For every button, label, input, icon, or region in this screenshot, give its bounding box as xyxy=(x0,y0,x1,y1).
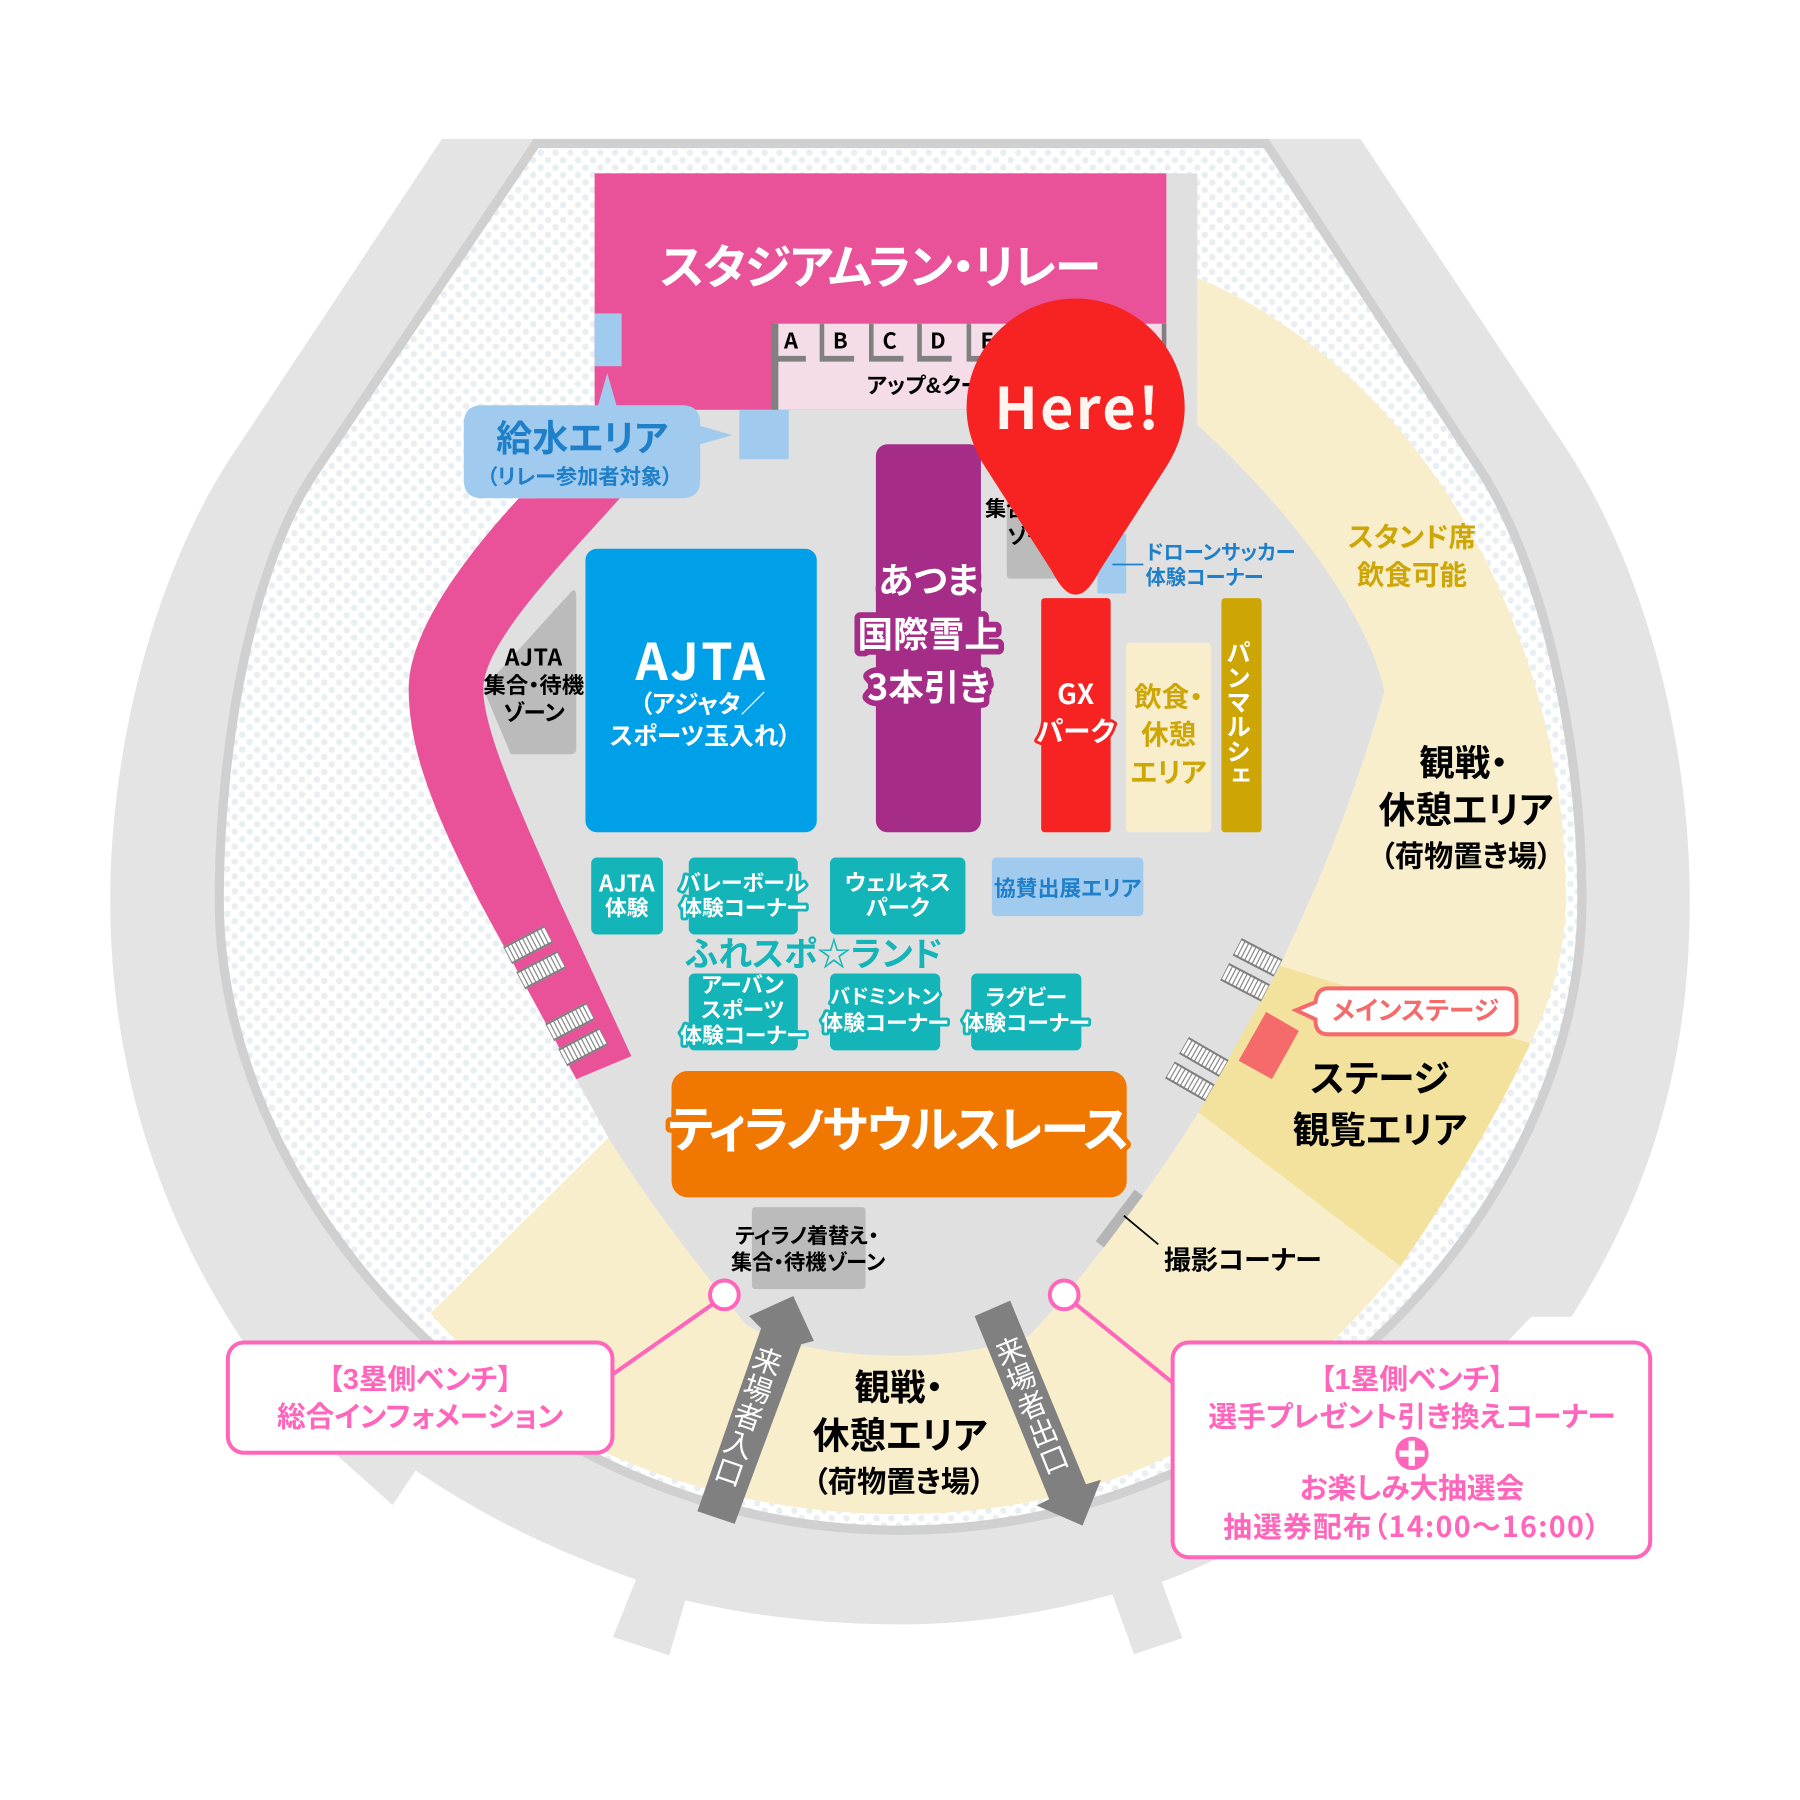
teal booth: badminton: 体験コーナー xyxy=(821,1010,949,1035)
drone soccer corner xyxy=(1097,534,1295,593)
panel: food and rest area xyxy=(1126,643,1211,832)
panel: AJTA: AJTA xyxy=(634,621,767,695)
arrow: visitor exit: 来場者出口 xyxy=(986,1330,1078,1481)
tyrannosaurus changing zone xyxy=(731,1207,885,1289)
panel: food and rest area: エリア xyxy=(1131,757,1207,788)
arrow: visitor entrance: 来場者入口 xyxy=(705,1341,792,1492)
panel: international snow tug of war: 国際雪上 xyxy=(858,615,1000,655)
teal booth: wellness park: ウェルネス xyxy=(845,870,951,895)
text: stand seating: スタンド席 xyxy=(1348,522,1476,553)
panel: international snow tug of war: あつま xyxy=(878,561,979,601)
text: stand seating: 飲食可能 xyxy=(1357,560,1467,591)
stairs on track xyxy=(503,926,608,1066)
heading: fureai sports land: ふれスポ☆ランド xyxy=(684,936,943,974)
drone soccer corner: ドローンサッカー xyxy=(1146,542,1295,564)
callout: first base bench: 抽選券配布（14:00～16:00） xyxy=(1223,1505,1601,1546)
panel: GX park xyxy=(1036,598,1115,832)
main stage marker xyxy=(1239,1012,1299,1079)
warm-up and cool-down zone: E xyxy=(981,324,994,355)
teal booth: wellness park xyxy=(830,858,965,934)
callout: third base bench: 【3塁側ベンチ】 xyxy=(329,1364,512,1396)
teal booth: AJTA experience: 体験 xyxy=(605,896,649,921)
callout: first base bench: お楽しみ大抽選会 xyxy=(1300,1473,1525,1505)
panel: bread marche xyxy=(1221,598,1262,832)
AJTA waiting zone: 集合・待機 xyxy=(483,673,585,698)
pin: here marker xyxy=(967,298,1185,595)
text: right viewing area xyxy=(1379,743,1554,874)
warm-up and cool-down zone xyxy=(771,324,1166,410)
teal booth: badminton xyxy=(821,973,949,1050)
teal booth: badminton: バドミントン xyxy=(830,986,940,1009)
panel: tyrannosaurus race xyxy=(668,1071,1130,1197)
arrow: visitor exit xyxy=(975,1301,1101,1526)
photo corner xyxy=(1100,1193,1322,1275)
text: stage viewing area xyxy=(1293,1059,1468,1151)
stadium outer concourse xyxy=(110,139,1690,1655)
panel: food and rest area: 休憩 xyxy=(1141,719,1196,750)
teal booth: rugby xyxy=(963,973,1090,1050)
teal booth: volleyball: 体験コーナー xyxy=(680,896,808,921)
text: bottom viewing area: （荷物置き場） xyxy=(813,1466,985,1499)
text: bottom viewing area: 休憩エリア xyxy=(813,1416,988,1457)
teal booth: wellness park: パーク xyxy=(866,896,930,921)
teal booth: AJTA experience: AJTA xyxy=(598,865,655,899)
panel: international snow tug of war xyxy=(858,444,1000,832)
callout: main stage: メインステージ xyxy=(1332,997,1499,1025)
panel: AJTA: （アジャタ／ xyxy=(640,690,765,718)
panel: AJTA xyxy=(585,549,817,832)
arrow: visitor entrance xyxy=(697,1296,814,1524)
panel: GX park: パーク xyxy=(1036,716,1115,747)
warm-up and cool-down zone: D xyxy=(930,324,946,355)
panel: international snow tug of war: 3本引き xyxy=(867,660,990,711)
text: stage viewing area: ステージ xyxy=(1310,1059,1449,1100)
teal booth: volleyball: バレーボール xyxy=(679,870,807,895)
AJTA waiting zone xyxy=(483,590,585,754)
text: right viewing area: 休憩エリア xyxy=(1379,790,1554,831)
text: stand seating xyxy=(1348,522,1476,591)
callout: third base bench: 総合インフォメーション xyxy=(277,1402,563,1434)
cream viewing and rest area xyxy=(430,278,1566,1514)
warm-up and cool-down zone: A xyxy=(783,324,799,355)
teal booth: urban sports: 体験コーナー xyxy=(680,1023,808,1048)
text: bottom viewing area: 観戦・ xyxy=(854,1368,943,1408)
teal booth: urban sports: スポーツ xyxy=(701,998,784,1023)
tyrannosaurus changing zone: 集合・待機ゾーン xyxy=(731,1250,885,1274)
callout: water area xyxy=(464,373,732,498)
teal booth: volleyball xyxy=(679,858,808,934)
teal booth: urban sports: アーバン xyxy=(702,972,784,997)
teal booth: rugby: 体験コーナー xyxy=(963,1010,1090,1035)
callout: first base bench: 選手プレゼント引き換えコーナー xyxy=(1208,1402,1616,1434)
GX park waiting zone xyxy=(985,482,1080,579)
callout: main stage xyxy=(1296,988,1516,1034)
warm-up and cool-down zone: C xyxy=(883,324,897,355)
stage viewing area xyxy=(1198,965,1530,1266)
stairs on stand side xyxy=(1165,938,1282,1101)
AJTA waiting zone: AJTA xyxy=(504,638,563,672)
panel: AJTA: スポーツ玉入れ） xyxy=(610,722,791,750)
stadium inner ring with dotted seating xyxy=(219,143,1582,1530)
callout: first base bench: 【1塁側ベンチ】 xyxy=(1320,1364,1504,1396)
icon: plus xyxy=(1395,1437,1429,1470)
callout: water area: 給水エリア xyxy=(496,418,668,459)
water area blocks xyxy=(595,313,789,459)
callout: third base bench xyxy=(228,1281,739,1453)
callout: water area: （リレー参加者対象） xyxy=(487,465,673,489)
photo corner: 撮影コーナー xyxy=(1164,1245,1322,1275)
teal booth: rugby: ラグビー xyxy=(986,985,1067,1010)
drone soccer corner: 体験コーナー xyxy=(1146,567,1264,590)
panel: bread marche: パンマルシェ xyxy=(1221,640,1257,788)
text: bottom viewing area xyxy=(813,1368,988,1499)
text: stage viewing area: 観覧エリア xyxy=(1293,1110,1468,1151)
pin: here marker: Here! xyxy=(994,362,1162,446)
sponsor exhibit area: 協賛出展エリア xyxy=(994,876,1141,901)
AJTA waiting zone: ゾーン xyxy=(503,700,565,725)
panel: stadium run relay xyxy=(595,173,1166,410)
teal booth: AJTA experience xyxy=(591,858,663,934)
panel: GX park: GX xyxy=(1057,672,1094,712)
warm-up and cool-down zone: アップ&クールダウン xyxy=(867,373,1065,398)
pink relay track xyxy=(409,498,631,1079)
teal booth: urban sports xyxy=(680,972,808,1050)
heading: stadium run relay: スタジアムラン・リレー xyxy=(660,241,1101,294)
sponsor exhibit area xyxy=(992,858,1143,916)
text: right viewing area: （荷物置き場） xyxy=(1380,841,1552,874)
tyrannosaurus changing zone: ティラノ着替え・ xyxy=(735,1224,879,1248)
central gray field xyxy=(425,173,1384,1356)
panel: tyrannosaurus race: ティラノサウルスレース xyxy=(668,1103,1130,1158)
warm-up and cool-down zone: B xyxy=(833,324,848,355)
GX park waiting zone: 集合・待機 xyxy=(985,497,1080,521)
callout: first base bench xyxy=(1050,1281,1650,1557)
panel: food and rest area: 飲食・ xyxy=(1134,681,1203,712)
GX park waiting zone: ゾーン xyxy=(1007,526,1066,549)
text: right viewing area: 観戦・ xyxy=(1419,743,1508,783)
